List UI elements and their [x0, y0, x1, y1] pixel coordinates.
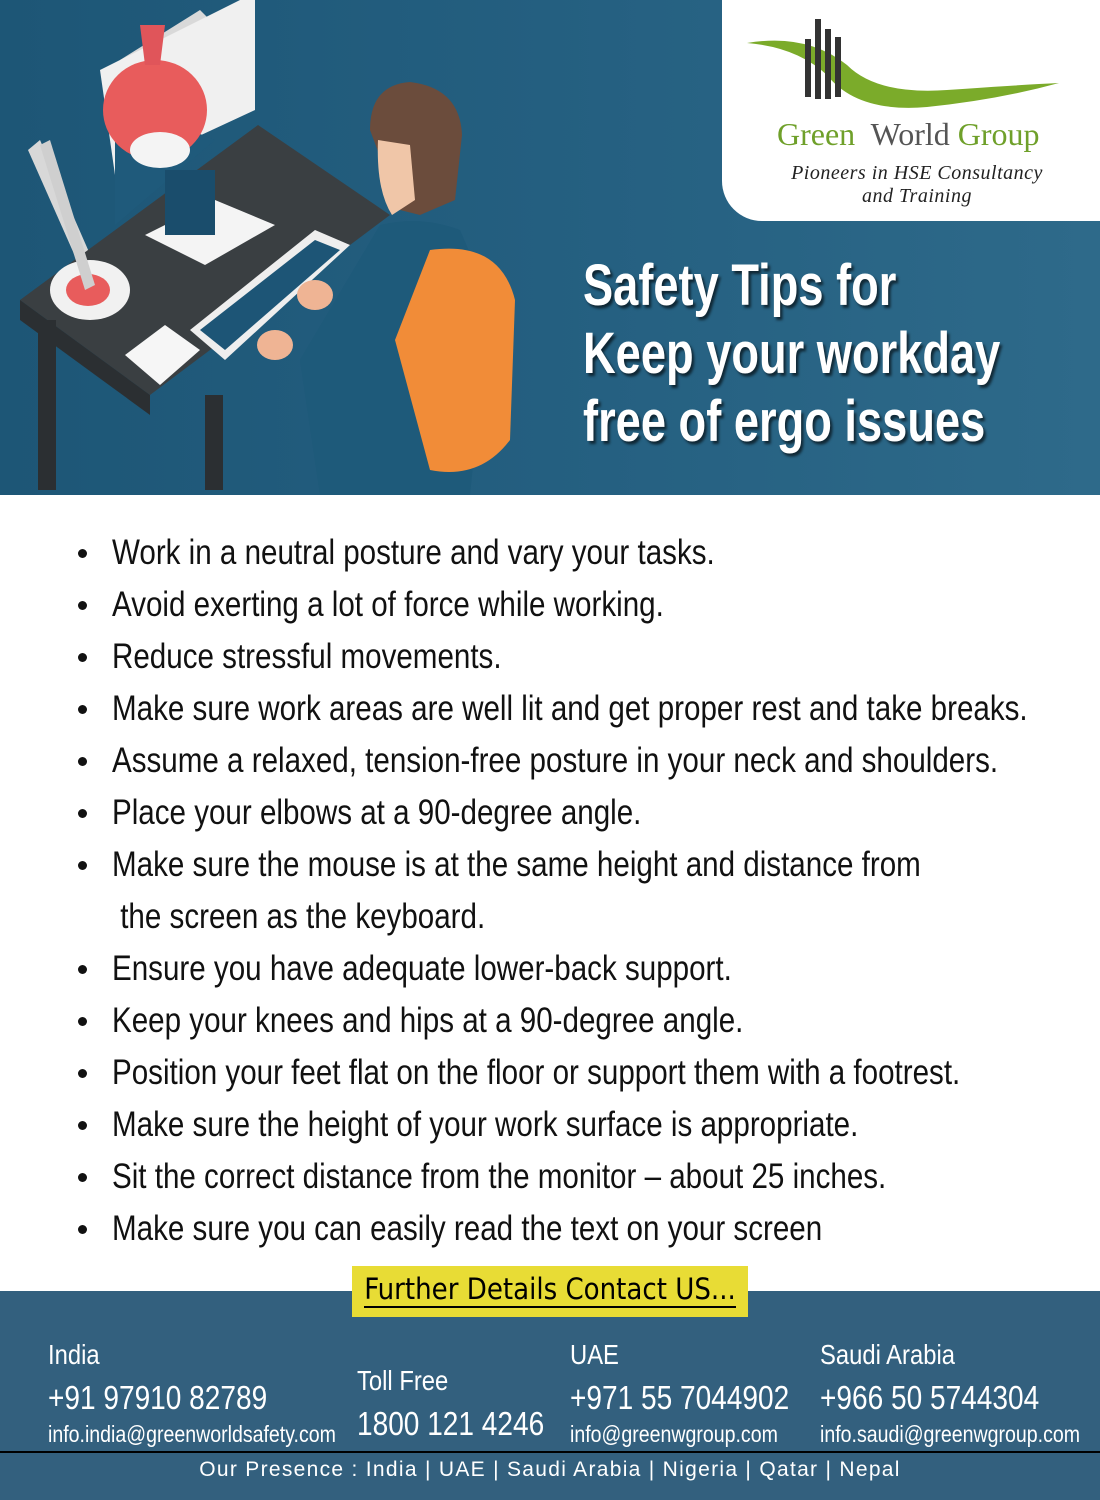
title: free of ergo issues — [583, 389, 985, 454]
presence line: Our Presence : India | UAE | Saudi Arabia | Nigeria | Qatar | Nepal — [199, 1458, 901, 1481]
tips list: Position your feet flat on the floor or support them with a footrest. — [112, 1053, 960, 1092]
tips list: Make sure the height of your work surface is appropriate. — [112, 1105, 858, 1144]
tagline — [791, 162, 1043, 207]
Saudi contact: Saudi Arabia — [820, 1339, 955, 1370]
footer band — [0, 1291, 1100, 1500]
Saudi contact: info.saudi@greenwgroup.com — [820, 1421, 1080, 1447]
tips list: Make sure work areas are well lit and get proper rest and take breaks. — [112, 689, 1028, 728]
title: Keep your workday — [583, 321, 1000, 386]
tips list: Ensure you have adequate lower-back support. — [112, 949, 732, 988]
tips list: Reduce stressful movements. — [112, 637, 502, 676]
tips list — [78, 533, 1028, 1248]
logo name: Green World Group — [777, 116, 1040, 152]
India contact: info.india@greenworldsafety.com — [48, 1421, 336, 1447]
India contact: +91 97910 82789 — [48, 1379, 267, 1416]
tips list: Work in a neutral posture and vary your tasks. — [112, 533, 715, 572]
UAE contact: UAE — [570, 1339, 619, 1370]
title: Safety Tips for — [583, 253, 896, 318]
toll free: 1800 121 4246 — [357, 1405, 544, 1442]
contact us callout: Further Details Contact US... — [364, 1272, 736, 1306]
Saudi contact: +966 50 5744304 — [820, 1379, 1039, 1416]
India contact: India — [48, 1339, 100, 1370]
tips list: the screen as the keyboard. — [120, 897, 485, 936]
toll free — [357, 1365, 544, 1442]
tips list: Sit the correct distance from the monitor – about 25 inches. — [112, 1157, 886, 1196]
toll free: Toll Free — [357, 1365, 448, 1396]
tips list: Assume a relaxed, tension-free posture in your neck and shoulders. — [112, 741, 998, 780]
tips list: Keep your knees and hips at a 90-degree angle. — [112, 1001, 743, 1040]
illustration: worker at desk — [20, 0, 515, 490]
tagline: and Training — [862, 185, 972, 207]
tips list: Make sure you can easily read the text on your screen — [112, 1209, 822, 1248]
logo mark — [747, 19, 1059, 108]
logo panel — [722, 0, 1100, 221]
Saudi contact — [820, 1339, 1080, 1447]
contact us callout — [352, 1266, 748, 1317]
tips list: Make sure the mouse is at the same height and distance from — [112, 845, 921, 884]
header banner — [0, 0, 1100, 495]
tagline: Pioneers in HSE Consultancy — [791, 162, 1043, 184]
tips list: Place your elbows at a 90-degree angle. — [112, 793, 641, 832]
India contact — [48, 1339, 336, 1447]
tips list: Avoid exerting a lot of force while working. — [112, 585, 664, 624]
UAE contact: +971 55 7044902 — [570, 1379, 789, 1416]
UAE contact: info@greenwgroup.com — [570, 1421, 778, 1447]
title — [583, 253, 1004, 458]
UAE contact — [570, 1339, 789, 1447]
